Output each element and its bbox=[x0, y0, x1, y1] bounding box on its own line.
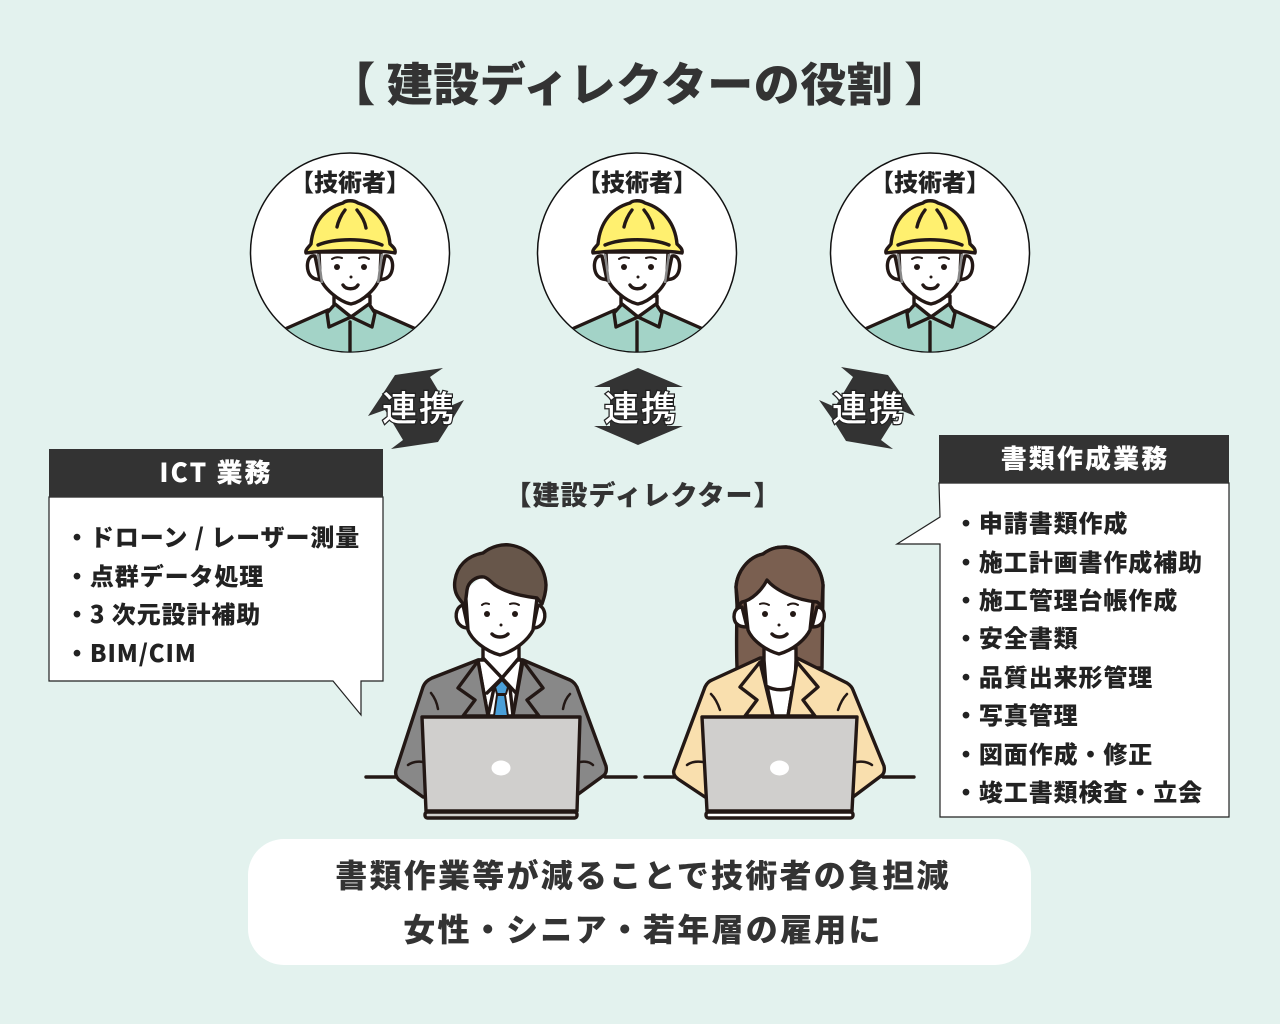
list: document tasks bbox=[954, 504, 1203, 808]
technician 3 bbox=[830, 153, 1030, 360]
callout: summary bbox=[248, 839, 1031, 965]
technician 2 bbox=[538, 153, 736, 360]
technician 1 bbox=[250, 153, 450, 360]
arrow: right collaboration: 連携 bbox=[832, 381, 906, 432]
text: summary line 1: 書類作業等が減ることで技術者の負担減 bbox=[335, 851, 951, 897]
panel header: ICT tasks bbox=[49, 449, 383, 497]
arrow: left collaboration bbox=[368, 368, 464, 449]
panel: ICT tasks bbox=[49, 449, 383, 715]
heading: document tasks: 書類作成業務 bbox=[1001, 439, 1169, 476]
arrow: left collaboration: 連携 bbox=[382, 381, 456, 432]
text: summary line 2: 女性・シニア・若年層の雇用に bbox=[403, 905, 883, 951]
title: 【 建設ディレクターの役割 】 bbox=[329, 49, 951, 115]
list: document tasks: ・申請書類作成 bbox=[954, 504, 1128, 539]
list: document tasks: ・施工計画書作成補助 bbox=[954, 543, 1203, 578]
heading: ICT tasks: ICT 業務 bbox=[159, 453, 273, 490]
list: ICT tasks: ・3 次元設計補助 bbox=[65, 595, 261, 630]
list: ICT tasks: ・BIM/CIM bbox=[65, 634, 197, 669]
label: construction director: 【建設ディレクター】 bbox=[504, 474, 782, 513]
list: ICT tasks bbox=[65, 518, 360, 669]
illustration: male director with laptop bbox=[366, 545, 636, 818]
arrow: centre collaboration bbox=[594, 368, 683, 445]
label: technician 3: 【技術者】 bbox=[870, 163, 990, 198]
list: ICT tasks: ・点群データ処理 bbox=[65, 557, 264, 592]
arrow: right collaboration bbox=[819, 367, 915, 449]
panel: document tasks bbox=[897, 435, 1229, 817]
illustration: female director with laptop bbox=[645, 547, 914, 818]
list: document tasks: ・施工管理台帳作成 bbox=[954, 581, 1178, 616]
list: document tasks: ・図面作成・修正 bbox=[954, 735, 1153, 770]
list: document tasks: ・安全書類 bbox=[954, 619, 1078, 654]
label: technician 1: 【技術者】 bbox=[290, 163, 410, 198]
label: technician 2: 【技術者】 bbox=[577, 163, 697, 198]
panel header: document tasks bbox=[939, 435, 1229, 483]
arrow: centre collaboration: 連携 bbox=[604, 381, 678, 432]
list: document tasks: ・品質出来形管理 bbox=[954, 658, 1153, 693]
list: document tasks: ・竣工書類検査・立会 bbox=[954, 773, 1203, 808]
list: document tasks: ・写真管理 bbox=[954, 696, 1078, 731]
list: ICT tasks: ・ドローン / レーザー測量 bbox=[65, 518, 360, 553]
